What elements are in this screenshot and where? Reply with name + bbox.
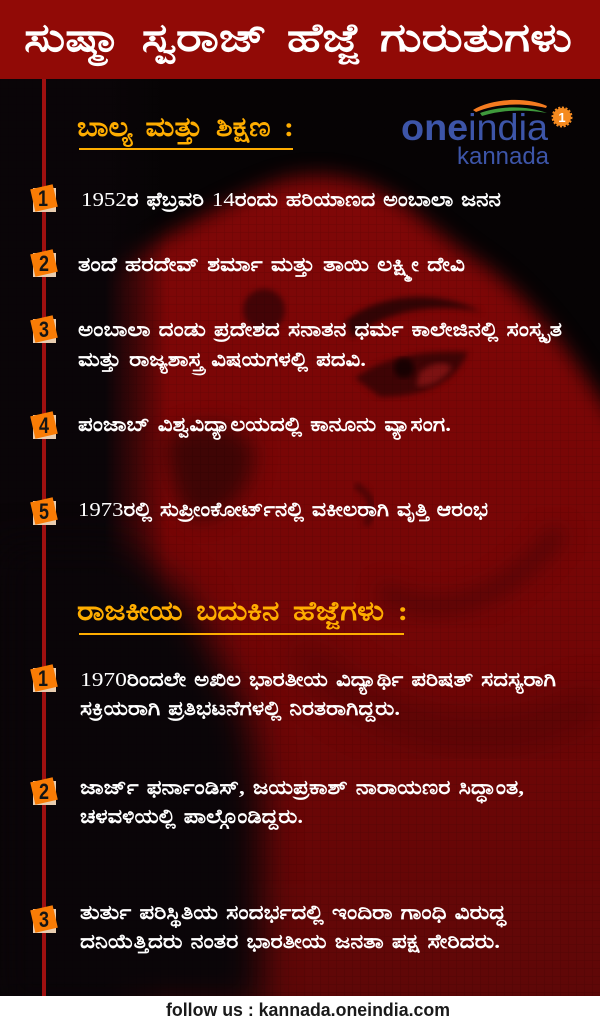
- item 1: [30, 184, 501, 213]
- political item 1: 1970 ರಿಂದಲೇ ಅಖಿಲ ಭಾರತೀಯ ವಿದ್ಯಾರ್ಥಿ ಪರಿಷತ್ ಸದಸ್ಯರಾಗಿ: [80, 669, 556, 696]
- political item 3: 3: [39, 907, 49, 932]
- timeline vertical line: [42, 79, 46, 996]
- item 5: 1973 ರಲ್ಲಿ ಸುಪ್ರೀಂಕೋರ್ಟ್‌ನಲ್ಲಿ ವಕೀಲರಾಗಿ ವೃತ್ತಿ ಆರಂಭ: [78, 499, 489, 523]
- heading: political life milestones: ರಾಜಕೀಯ ಬದುಕಿನ ಹೆಜ್ಜೆಗಳು :: [77, 596, 408, 630]
- item 4: ಪಂಜಾಬ್ ವಿಶ್ವವಿದ್ಯಾಲಯದಲ್ಲಿ ಕಾನೂನು ವ್ಯಾಸಂಗ.: [78, 415, 451, 441]
- political item 1: ಸಕ್ರಿಯರಾಗಿ ಪ್ರತಿಭಟನೆಗಳಲ್ಲಿ ನಿರತರಾಗಿದ್ದರು.: [80, 699, 400, 723]
- item 3: [30, 315, 563, 376]
- item 2: ತಂದೆ ಹರದೇವ್ ಶರ್ಮಾ ಮತ್ತು ತಾಯಿ ಲಕ್ಷ್ಮೀ ದೇವಿ: [78, 255, 466, 282]
- political item 2: ಚಳವಳಿಯಲ್ಲಿ ಪಾಲ್ಗೊಂಡಿದ್ದರು.: [80, 807, 303, 831]
- item 3: 3: [39, 317, 49, 342]
- title banner: [0, 0, 600, 79]
- political item 1: [30, 664, 556, 723]
- political item 2: [30, 777, 524, 831]
- logo: oneindia kannada: oneindia: [401, 107, 548, 148]
- logo: oneindia kannada: 1: [558, 110, 566, 125]
- heading: childhood and education: ಬಾಲ್ಯ ಮತ್ತು ಶಿಕ್ಷಣ :: [77, 112, 294, 147]
- footer strip: follow us : kannada.oneindia.com: [166, 1000, 450, 1020]
- item 5: [30, 497, 489, 525]
- item 2: [30, 249, 466, 282]
- political item 1: 1: [38, 666, 48, 691]
- item 5: 5: [39, 499, 49, 524]
- item 1: 1: [38, 186, 48, 211]
- logo: oneindia kannada: kannada: [457, 143, 550, 170]
- political item 3: [30, 903, 507, 954]
- political item 3: ತುರ್ತು ಪರಿಸ್ಥಿತಿಯ ಸಂದರ್ಭದಲ್ಲಿ ಇಂದಿರಾ ಗಾಂಧಿ ವಿರುದ್ಧ: [80, 903, 507, 929]
- political item 2: 2: [39, 779, 49, 804]
- item 4: 4: [39, 413, 50, 438]
- item 1: 1952 ರ ಫೆಬ್ರವರಿ 14ರಂದು ಹರಿಯಾಣದ ಅಂಬಾಲಾ ಜನನ: [81, 189, 501, 213]
- footer strip: [0, 996, 600, 1026]
- item 3: ಮತ್ತು ರಾಜ್ಯಶಾಸ್ತ್ರ ವಿಷಯಗಳಲ್ಲಿ ಪದವಿ.: [78, 350, 366, 376]
- item 4: [30, 411, 451, 441]
- political item 3: ದನಿಯೆತ್ತಿದರು ನಂತರ ಭಾರತೀಯ ಜನತಾ ಪಕ್ಷ ಸೇರಿದರು.: [80, 932, 500, 954]
- logo: oneindia kannada: [401, 100, 571, 170]
- item 2: 2: [39, 251, 49, 276]
- political item 2: ಜಾರ್ಜ್ ಫರ್ನಾಂಡಿಸ್, ಜಯಪ್ರಕಾಶ್ ನಾರಾಯಣರ ಸಿದ್ಧಾಂತ,: [80, 778, 524, 805]
- item 3: ಅಂಬಾಲಾ ದಂಡು ಪ್ರದೇಶದ ಸನಾತನ ಧರ್ಮ ಕಾಲೇಜಿನಲ್ಲಿ ಸಂಸ್ಕೃತ: [78, 320, 563, 344]
- title banner: ಸುಷ್ಮಾ ಸ್ವರಾಜ್ ಹೆಜ್ಜೆ ಗುರುತುಗಳು: [24, 17, 572, 67]
